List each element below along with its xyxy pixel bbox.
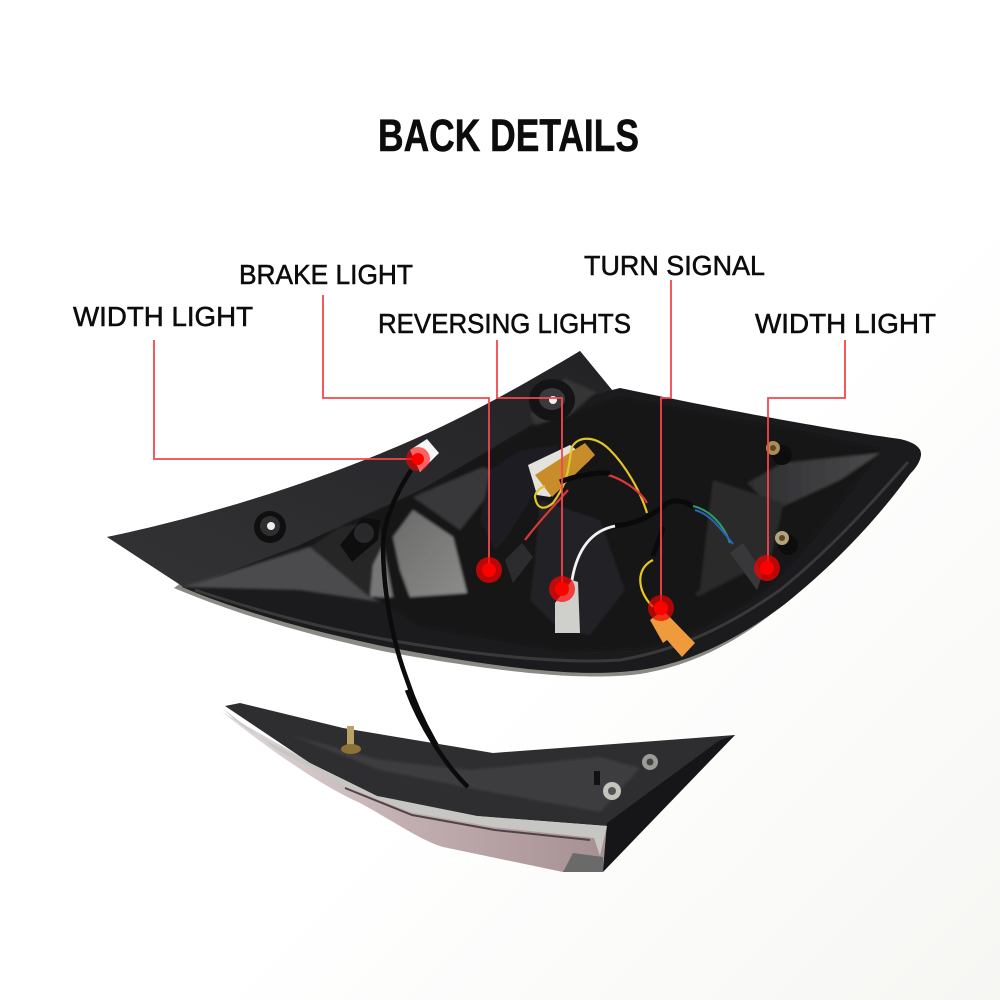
lower lamp piece	[222, 690, 735, 872]
lamp housing	[107, 351, 921, 673]
yellow wire	[535, 439, 647, 513]
white wire	[572, 526, 615, 580]
central black panel	[590, 423, 713, 625]
pin	[594, 771, 600, 785]
flange ear	[530, 378, 596, 425]
red wire	[525, 475, 647, 540]
mounting stud right flange	[529, 379, 575, 421]
right dark panel	[690, 480, 783, 597]
callout: turn signal	[584, 250, 765, 621]
leader line	[768, 340, 845, 568]
right connector	[730, 543, 763, 590]
label: BRAKE LIGHT	[239, 259, 413, 290]
centre grey block	[530, 500, 625, 635]
lamp lower lens edge	[174, 582, 800, 676]
dark right side	[603, 735, 735, 872]
white tag	[410, 439, 439, 472]
socket block	[310, 520, 385, 597]
bolt post	[341, 726, 361, 754]
resistor	[528, 443, 595, 497]
leader line	[497, 340, 562, 589]
yellow turn wire	[640, 560, 653, 607]
leader line	[154, 340, 418, 459]
brass bolts	[766, 441, 798, 555]
dark strip line	[345, 788, 590, 840]
marker	[754, 555, 780, 581]
callout: width light right	[754, 308, 936, 581]
callout: width light left	[73, 301, 430, 471]
grey lens corner	[563, 853, 603, 872]
label: TURN SIGNAL	[584, 250, 765, 281]
nuts	[603, 754, 658, 800]
leader line	[661, 280, 671, 608]
black wire loom	[560, 473, 693, 556]
light centre-left panel	[393, 510, 467, 597]
grey upper block	[413, 467, 500, 530]
label: WIDTH LIGHT	[73, 301, 253, 332]
socket post	[340, 518, 380, 562]
pink lens	[222, 712, 610, 872]
marker	[549, 576, 575, 602]
rim bands along lower edge	[195, 462, 908, 661]
dark interior shading	[290, 735, 640, 812]
leader line	[323, 295, 489, 570]
marker	[476, 557, 502, 583]
green and blue wires	[693, 506, 730, 543]
cable end	[407, 690, 468, 787]
title: BACK DETAILS	[378, 110, 639, 161]
callout: brake light	[239, 259, 502, 583]
right grey wedge	[747, 453, 880, 510]
main tail lamp, back view	[107, 351, 921, 787]
white connector	[555, 580, 580, 633]
dark back	[225, 703, 735, 870]
orange connector	[650, 610, 695, 657]
left connector	[505, 543, 533, 583]
label: REVERSING LIGHTS	[378, 308, 631, 339]
mounting stud left	[254, 511, 286, 543]
marker	[406, 447, 430, 471]
callout: reversing lights	[378, 308, 631, 602]
marker	[648, 595, 674, 621]
label: WIDTH LIGHT	[755, 308, 936, 339]
cable	[383, 470, 468, 787]
dark inner cavity	[183, 378, 880, 650]
upper flange	[107, 351, 612, 588]
grey left panel	[183, 547, 380, 602]
silver strip	[222, 708, 607, 856]
